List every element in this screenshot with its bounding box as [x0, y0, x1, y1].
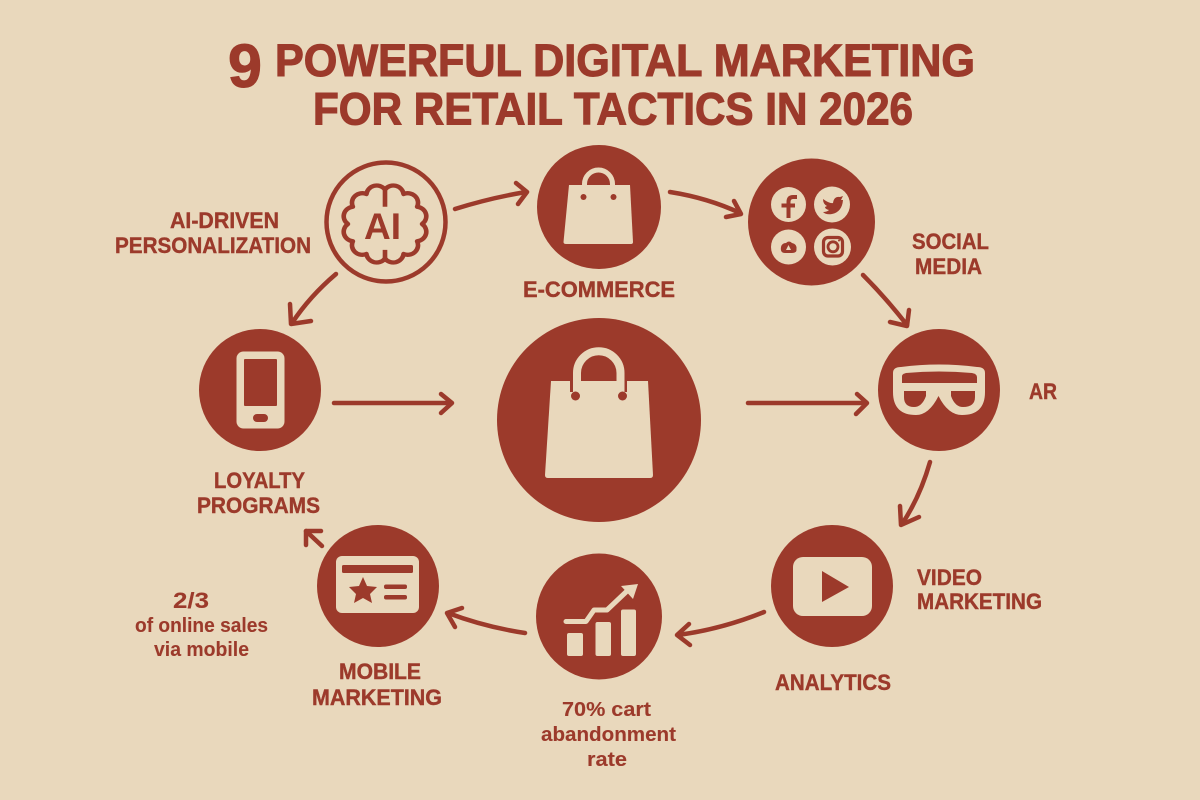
arrow: center to AR	[748, 394, 867, 414]
icon: analytics chart	[536, 554, 662, 680]
label: social media: SOCIAL	[912, 229, 989, 254]
label: mobile marketing: MOBILE	[339, 659, 421, 684]
title	[228, 32, 975, 134]
icon: AI brain: AI	[364, 206, 401, 247]
arrow: social media to AR	[863, 275, 909, 326]
label: cart abandonment stat	[541, 699, 676, 771]
arrow: AR to video marketing	[900, 462, 930, 525]
label: cart abandonment stat: rate	[587, 749, 627, 771]
label: video marketing: MARKETING	[917, 589, 1042, 614]
label: mobile marketing: MARKETING	[312, 685, 442, 710]
icon: central shopping bag	[497, 318, 701, 522]
title: 9	[228, 32, 262, 100]
label: loyalty programs	[197, 468, 320, 518]
icon: loyalty phone	[199, 329, 321, 451]
arrow: AI to phone	[290, 274, 336, 324]
label: loyalty programs: PROGRAMS	[197, 493, 320, 518]
label: AI-driven personalization: AI-DRIVEN	[170, 208, 279, 233]
label: mobile sales stat: of online sales	[135, 615, 268, 637]
label: AI-driven personalization: PERSONALIZATION	[115, 233, 311, 258]
label: social media	[912, 229, 989, 279]
arrow: e-commerce to social media	[670, 192, 741, 217]
label: video marketing: VIDEO	[917, 565, 982, 590]
icon: AR glasses	[878, 329, 1000, 451]
label: social media: MEDIA	[915, 254, 982, 279]
icon: social media	[748, 158, 875, 286]
label: mobile sales stat: 2/3	[173, 588, 209, 613]
label: video marketing	[917, 565, 1042, 614]
icon: mobile marketing card	[317, 525, 439, 647]
icon: AI brain	[326, 162, 446, 282]
title: FOR RETAIL TACTICS IN 2026	[313, 84, 913, 134]
arrow: AI to e-commerce	[455, 183, 527, 209]
label: analytics: ANALYTICS	[775, 670, 891, 695]
icon: e-commerce bag	[537, 145, 661, 269]
label: e-commerce: E-COMMERCE	[523, 277, 675, 302]
label: mobile sales stat: via mobile	[154, 639, 249, 661]
label: AR: AR	[1029, 379, 1057, 404]
arrow: phone to center	[334, 394, 452, 413]
label: loyalty programs: LOYALTY	[214, 468, 305, 493]
label: cart abandonment stat: 70% cart	[562, 699, 651, 721]
label: mobile marketing	[312, 659, 442, 710]
arrow: video marketing to analytics	[677, 612, 764, 645]
label: mobile sales stat	[135, 588, 268, 661]
arrow: analytics to mobile marketing	[447, 608, 525, 633]
title: POWERFUL DIGITAL MARKETING	[275, 35, 975, 86]
arrow: mobile marketing to loyalty programs	[306, 531, 322, 546]
icon: video	[771, 525, 893, 647]
label: AI-driven personalization	[115, 208, 311, 258]
label: cart abandonment stat: abandonment	[541, 724, 676, 746]
